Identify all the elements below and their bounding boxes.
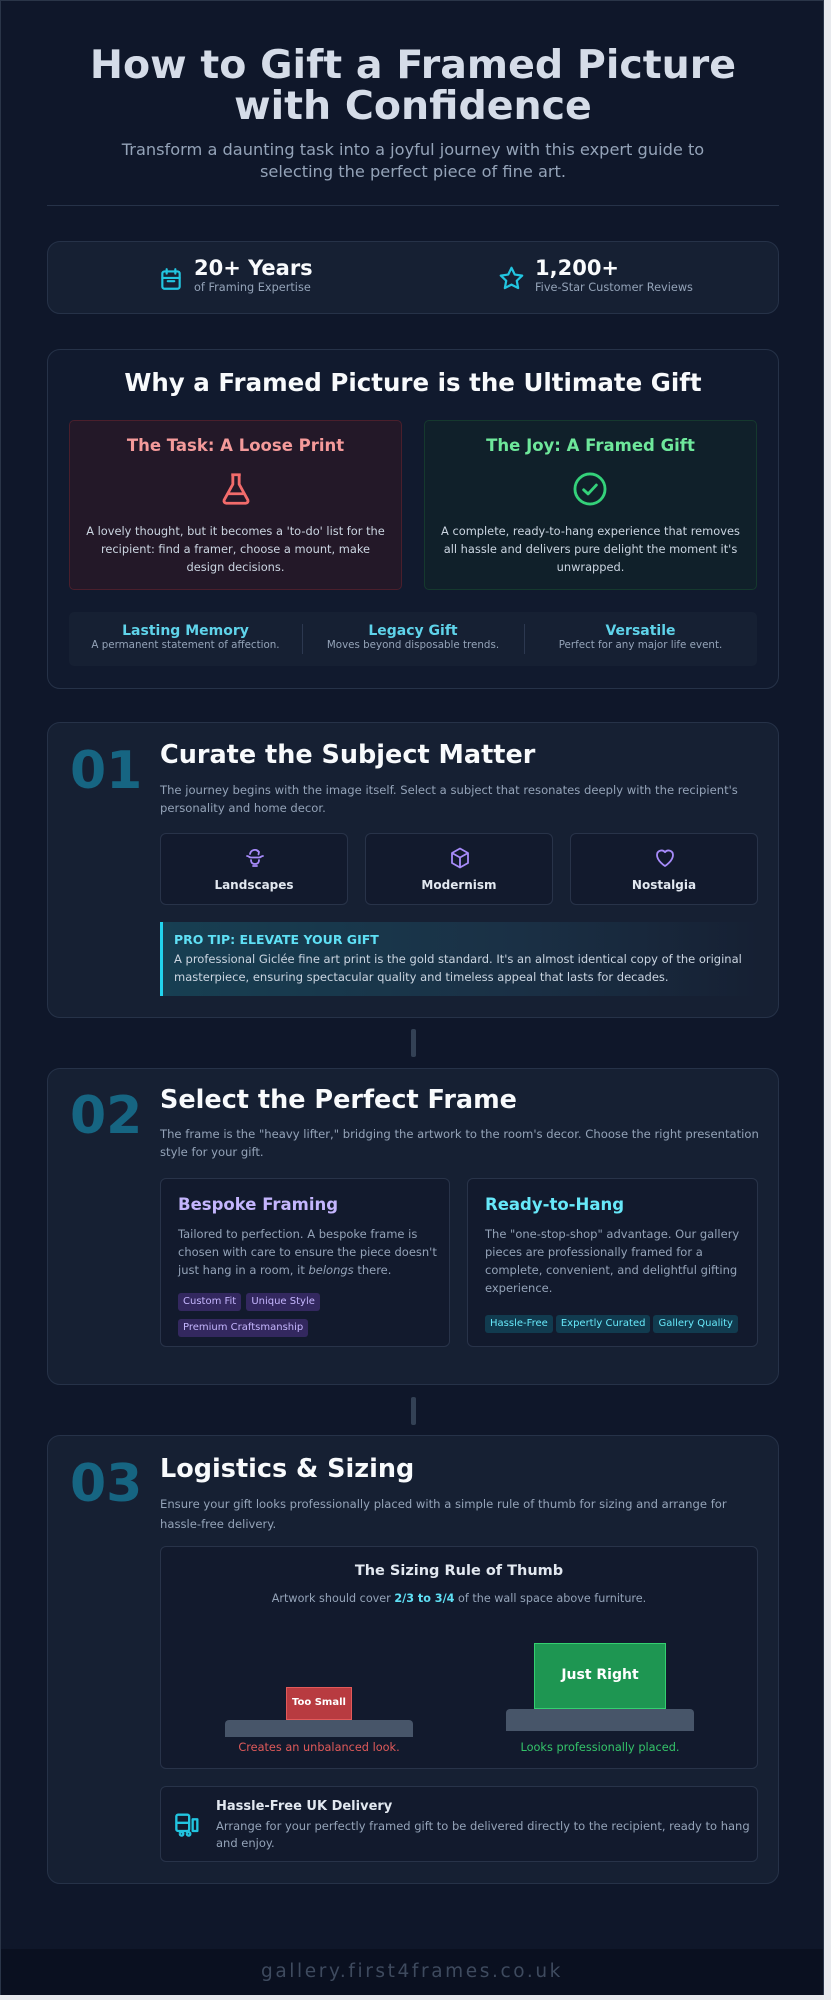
benefit: versatile <box>559 623 722 651</box>
footer: gallery.first4frames.co.uk <box>261 1961 563 1982</box>
too small example <box>225 1687 413 1754</box>
tags: Hassle-Free <box>490 1318 548 1329</box>
benefit: versatile: Perfect for any major life event. <box>559 639 722 651</box>
stat: years <box>194 256 313 294</box>
title: How to Gift a Framed Picture <box>90 42 736 88</box>
sizing diagram <box>160 1546 758 1769</box>
icon: calendar <box>161 268 181 290</box>
description: The journey begins with the image itself. Select a subject that resonates deeply with the recipient's personality and home decor. <box>160 783 738 814</box>
number 03: 03 <box>70 1454 142 1514</box>
connector <box>411 1029 416 1057</box>
just right example <box>506 1643 694 1754</box>
callout: pro tip: PRO TIP: ELEVATE YOUR GIFT <box>174 932 379 947</box>
tags: Unique Style <box>251 1296 315 1307</box>
stat: reviews: 1,200+ <box>535 256 619 280</box>
description: The frame is the "heavy lifter," bridging the artwork to the room's decor. Choose the right presentation style for your gift. <box>160 1127 759 1158</box>
card: bespoke <box>160 1178 450 1347</box>
card: landscapes: Landscapes <box>214 878 294 892</box>
card: landscapes <box>160 833 348 905</box>
tags: Custom Fit <box>183 1296 236 1307</box>
panel: step 03 <box>47 1435 779 1884</box>
number 01: 01 <box>70 741 142 801</box>
tags <box>485 1315 738 1333</box>
panel: why framed <box>47 349 779 689</box>
card: joy: A complete, ready-to-hang experience that removes all hassle and delivers pure delight the moment it's unwrapped. <box>441 524 740 574</box>
heading: Why a Framed Picture is the Ultimate Gift <box>124 368 702 397</box>
card: task: The Task: A Loose Print <box>127 436 344 455</box>
strip: benefits <box>69 612 757 666</box>
connector <box>411 1397 416 1425</box>
card: task: A lovely thought, but it becomes a 'to-do' list for the recipient: find a framer, choose a mount, make design decisions. <box>86 524 385 574</box>
heading: Select the Perfect Frame <box>160 1085 517 1115</box>
card: nostalgia: Nostalgia <box>632 878 696 892</box>
tags <box>178 1293 320 1337</box>
subtitle <box>122 140 704 181</box>
too small example: Creates an unbalanced look. <box>238 1741 400 1754</box>
stat: years: 20+ Years <box>194 256 313 280</box>
delivery callout: Hassle-Free UK Delivery <box>216 1799 392 1814</box>
card: bespoke: Bespoke Framing <box>178 1195 338 1214</box>
delivery callout: Arrange for your perfectly framed gift to be delivered directly to the recipient, ready to hang and enjoy. <box>216 1819 750 1850</box>
icon: flask <box>222 473 250 505</box>
benefit: lasting memory <box>91 623 280 651</box>
panel: step 02 <box>47 1068 779 1385</box>
icon: star <box>500 266 524 290</box>
panel: stats <box>47 241 779 314</box>
tags: Premium Craftsmanship <box>183 1322 303 1333</box>
heading: Logistics & Sizing <box>160 1454 414 1484</box>
card: nostalgia <box>570 833 758 905</box>
stat: reviews <box>535 256 693 294</box>
benefit: legacy: Legacy Gift <box>368 623 458 639</box>
benefit: lasting memory: Lasting Memory <box>122 623 249 639</box>
card: bespoke: Tailored to perfection. A bespoke frame is chosen with care to ensure the piece doesn't just hang in a room, it belongs there. <box>178 1227 437 1277</box>
benefit: legacy <box>327 623 499 651</box>
just right example: Looks professionally placed. <box>521 1741 679 1754</box>
card: ready to hang: Ready-to-Hang <box>485 1195 624 1214</box>
title: with Confidence <box>234 83 592 129</box>
card: modernism <box>365 833 553 905</box>
title <box>90 42 736 129</box>
card: task <box>69 420 402 590</box>
card: ready to hang <box>467 1178 758 1347</box>
icon: check circle <box>574 472 606 506</box>
callout: pro tip <box>160 922 758 996</box>
heading: Curate the Subject Matter <box>160 740 535 770</box>
card: ready to hang: The "one-stop-shop" advantage. Our gallery pieces are professionally framed for a complete, convenient, and delightful gifting experience. <box>485 1227 739 1295</box>
subtitle: Transform a daunting task into a joyful journey with this expert guide to <box>122 140 704 159</box>
benefit: lasting memory: A permanent statement of affection. <box>91 639 280 651</box>
tags: Gallery Quality <box>658 1318 733 1329</box>
description: Ensure your gift looks professionally placed with a simple rule of thumb for sizing and arrange for hassle-free delivery. <box>160 1497 727 1531</box>
just right example: Just Right <box>561 1667 639 1683</box>
icon: truck <box>175 1814 198 1837</box>
card: modernism: Modernism <box>421 878 497 892</box>
callout: pro tip: A professional Giclée fine art print is the gold standard. It's an almost identical copy of the original masterpiece, ensuring spectacular quality and timeless appeal that lasts for decades. <box>174 952 742 984</box>
benefit: legacy: Moves beyond disposable trends. <box>327 639 499 651</box>
footer <box>1 1949 823 1995</box>
benefit: versatile: Versatile <box>605 623 676 639</box>
subtitle: selecting the perfect piece of fine art. <box>260 162 566 181</box>
number 02: 02 <box>70 1086 142 1146</box>
tags: Expertly Curated <box>561 1318 645 1329</box>
card: joy: The Joy: A Framed Gift <box>486 436 695 455</box>
stat: years: of Framing Expertise <box>194 281 311 294</box>
too small example: Too Small <box>292 1697 346 1708</box>
panel: step 01 <box>47 722 779 1018</box>
stat: reviews: Five-Star Customer Reviews <box>535 281 693 294</box>
sizing diagram: The Sizing Rule of Thumb <box>355 1563 563 1579</box>
sizing diagram: Artwork should cover 2/3 to 3/4 of the wall space above furniture. <box>272 1592 646 1605</box>
card: joy <box>424 420 757 590</box>
delivery callout <box>160 1786 758 1862</box>
